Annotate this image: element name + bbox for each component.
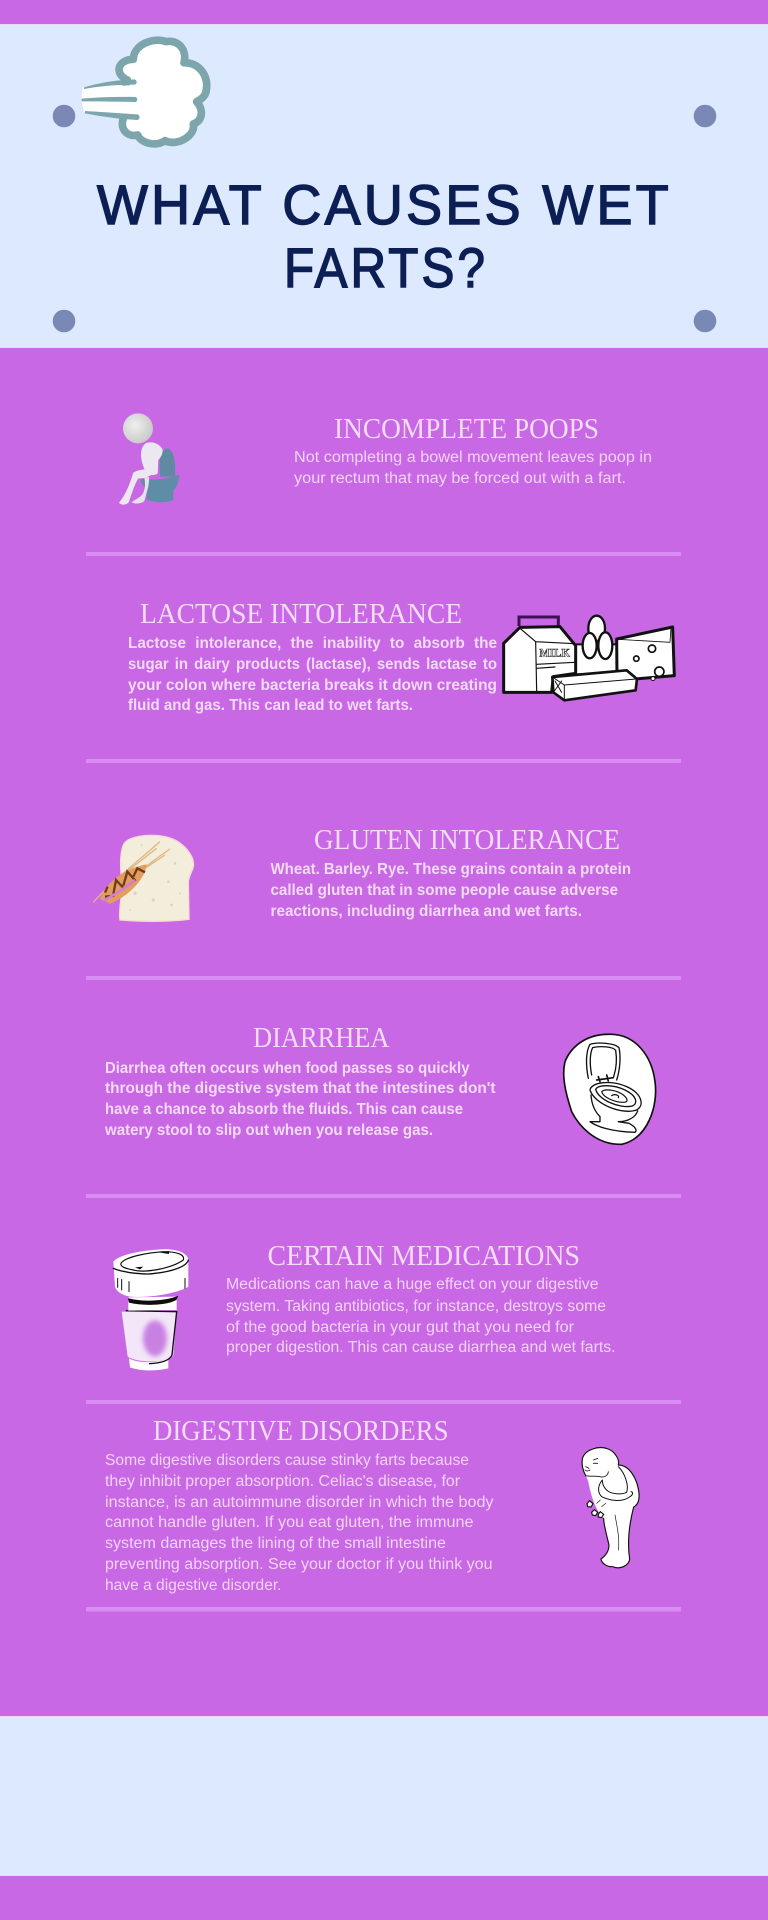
text block: Wheat. Barley. Rye. These grains contain a protein — [270, 861, 631, 878]
icon: pill bottle — [113, 1249, 188, 1370]
text block: Medications can have a huge effect on your digestive — [226, 1276, 598, 1293]
text block: your colon where bacteria breaks it down creating — [128, 677, 497, 694]
icon: person with stomach ache — [582, 1448, 639, 1568]
text block: through the digestive system that the intestines don't — [105, 1080, 496, 1097]
text block: they inhibit proper absorption. Celiac's disease, for — [105, 1473, 460, 1490]
text block: have a digestive disorder. — [105, 1577, 282, 1594]
text block: reactions, including diarrhea and wet farts. — [270, 903, 582, 920]
text block: Lactose intolerance, the inability to absorb the — [128, 635, 497, 652]
text block: Not completing a bowel movement leaves poop in — [294, 449, 652, 466]
text block: system damages the lining of the small intestine — [105, 1535, 446, 1552]
text block — [104, 1060, 495, 1139]
icon: corner dot bottom left — [53, 310, 75, 332]
text block: proper digestion. This can cause diarrhea and wet farts. — [226, 1339, 616, 1356]
panel: diarrhea — [104, 1023, 656, 1144]
panel: certain medications — [113, 1241, 616, 1370]
icon: toilet in blob — [564, 1034, 656, 1144]
heading: CERTAIN MEDICATIONS — [268, 1241, 580, 1272]
text block — [105, 1452, 494, 1594]
text block: have a chance to absorb the fluids. This can cause — [105, 1101, 463, 1118]
heading: INCOMPLETE POOPS — [334, 414, 599, 445]
heading: DIGESTIVE DISORDERS — [153, 1416, 448, 1447]
icon: corner dot top left — [53, 105, 75, 127]
text block: of the good bacteria in your gut that you need for — [226, 1319, 574, 1336]
text block: Some digestive disorders cause stinky farts because — [105, 1452, 469, 1469]
text block — [128, 635, 497, 714]
icon: corner dot bottom right — [694, 310, 716, 332]
icon: corner dot top right — [694, 105, 716, 127]
icon: figure on toilet — [119, 413, 179, 505]
text block: sugar in dairy products (lactase), sends lactase to — [128, 656, 497, 673]
text block: called gluten that in some people cause adverse — [270, 882, 618, 899]
text block — [270, 861, 631, 920]
panel: lactose intolerance — [128, 599, 674, 714]
text block: cannot handle gluten. If you eat gluten, the immune — [105, 1514, 474, 1531]
title — [97, 173, 672, 299]
panel: incomplete poops — [119, 413, 652, 505]
text block: Diarrhea often occurs when food passes so quickly — [105, 1060, 470, 1077]
icon: dairy products: MILK — [539, 648, 570, 660]
icon: bread and wheat — [93, 835, 193, 921]
panel: gluten intolerance — [93, 825, 631, 921]
text block — [294, 449, 652, 487]
panel: digestive disorders — [105, 1416, 639, 1594]
text block: instance, is an autoimmune disorder in which the body — [105, 1494, 494, 1511]
text block — [226, 1276, 616, 1356]
panel: title banner — [0, 24, 768, 348]
text block: watery stool to slip out when you release gas. — [104, 1122, 433, 1139]
text block: preventing absorption. See your doctor if you think you — [105, 1556, 493, 1573]
text block: fluid and gas. This can lead to wet farts. — [128, 697, 413, 714]
title: WHAT CAUSES WET — [97, 173, 672, 236]
text block: your rectum that may be forced out with a fart. — [294, 470, 626, 487]
heading: DIARRHEA — [253, 1023, 390, 1054]
text block: system. Taking antibiotics, for instance, destroys some — [226, 1298, 606, 1315]
heading: GLUTEN INTOLERANCE — [314, 825, 620, 856]
title: FARTS? — [284, 236, 488, 299]
icon: dairy products — [504, 616, 674, 700]
icon: fart cloud — [81, 40, 207, 144]
heading: LACTOSE INTOLERANCE — [140, 599, 462, 630]
panel: footer band — [0, 1716, 768, 1876]
